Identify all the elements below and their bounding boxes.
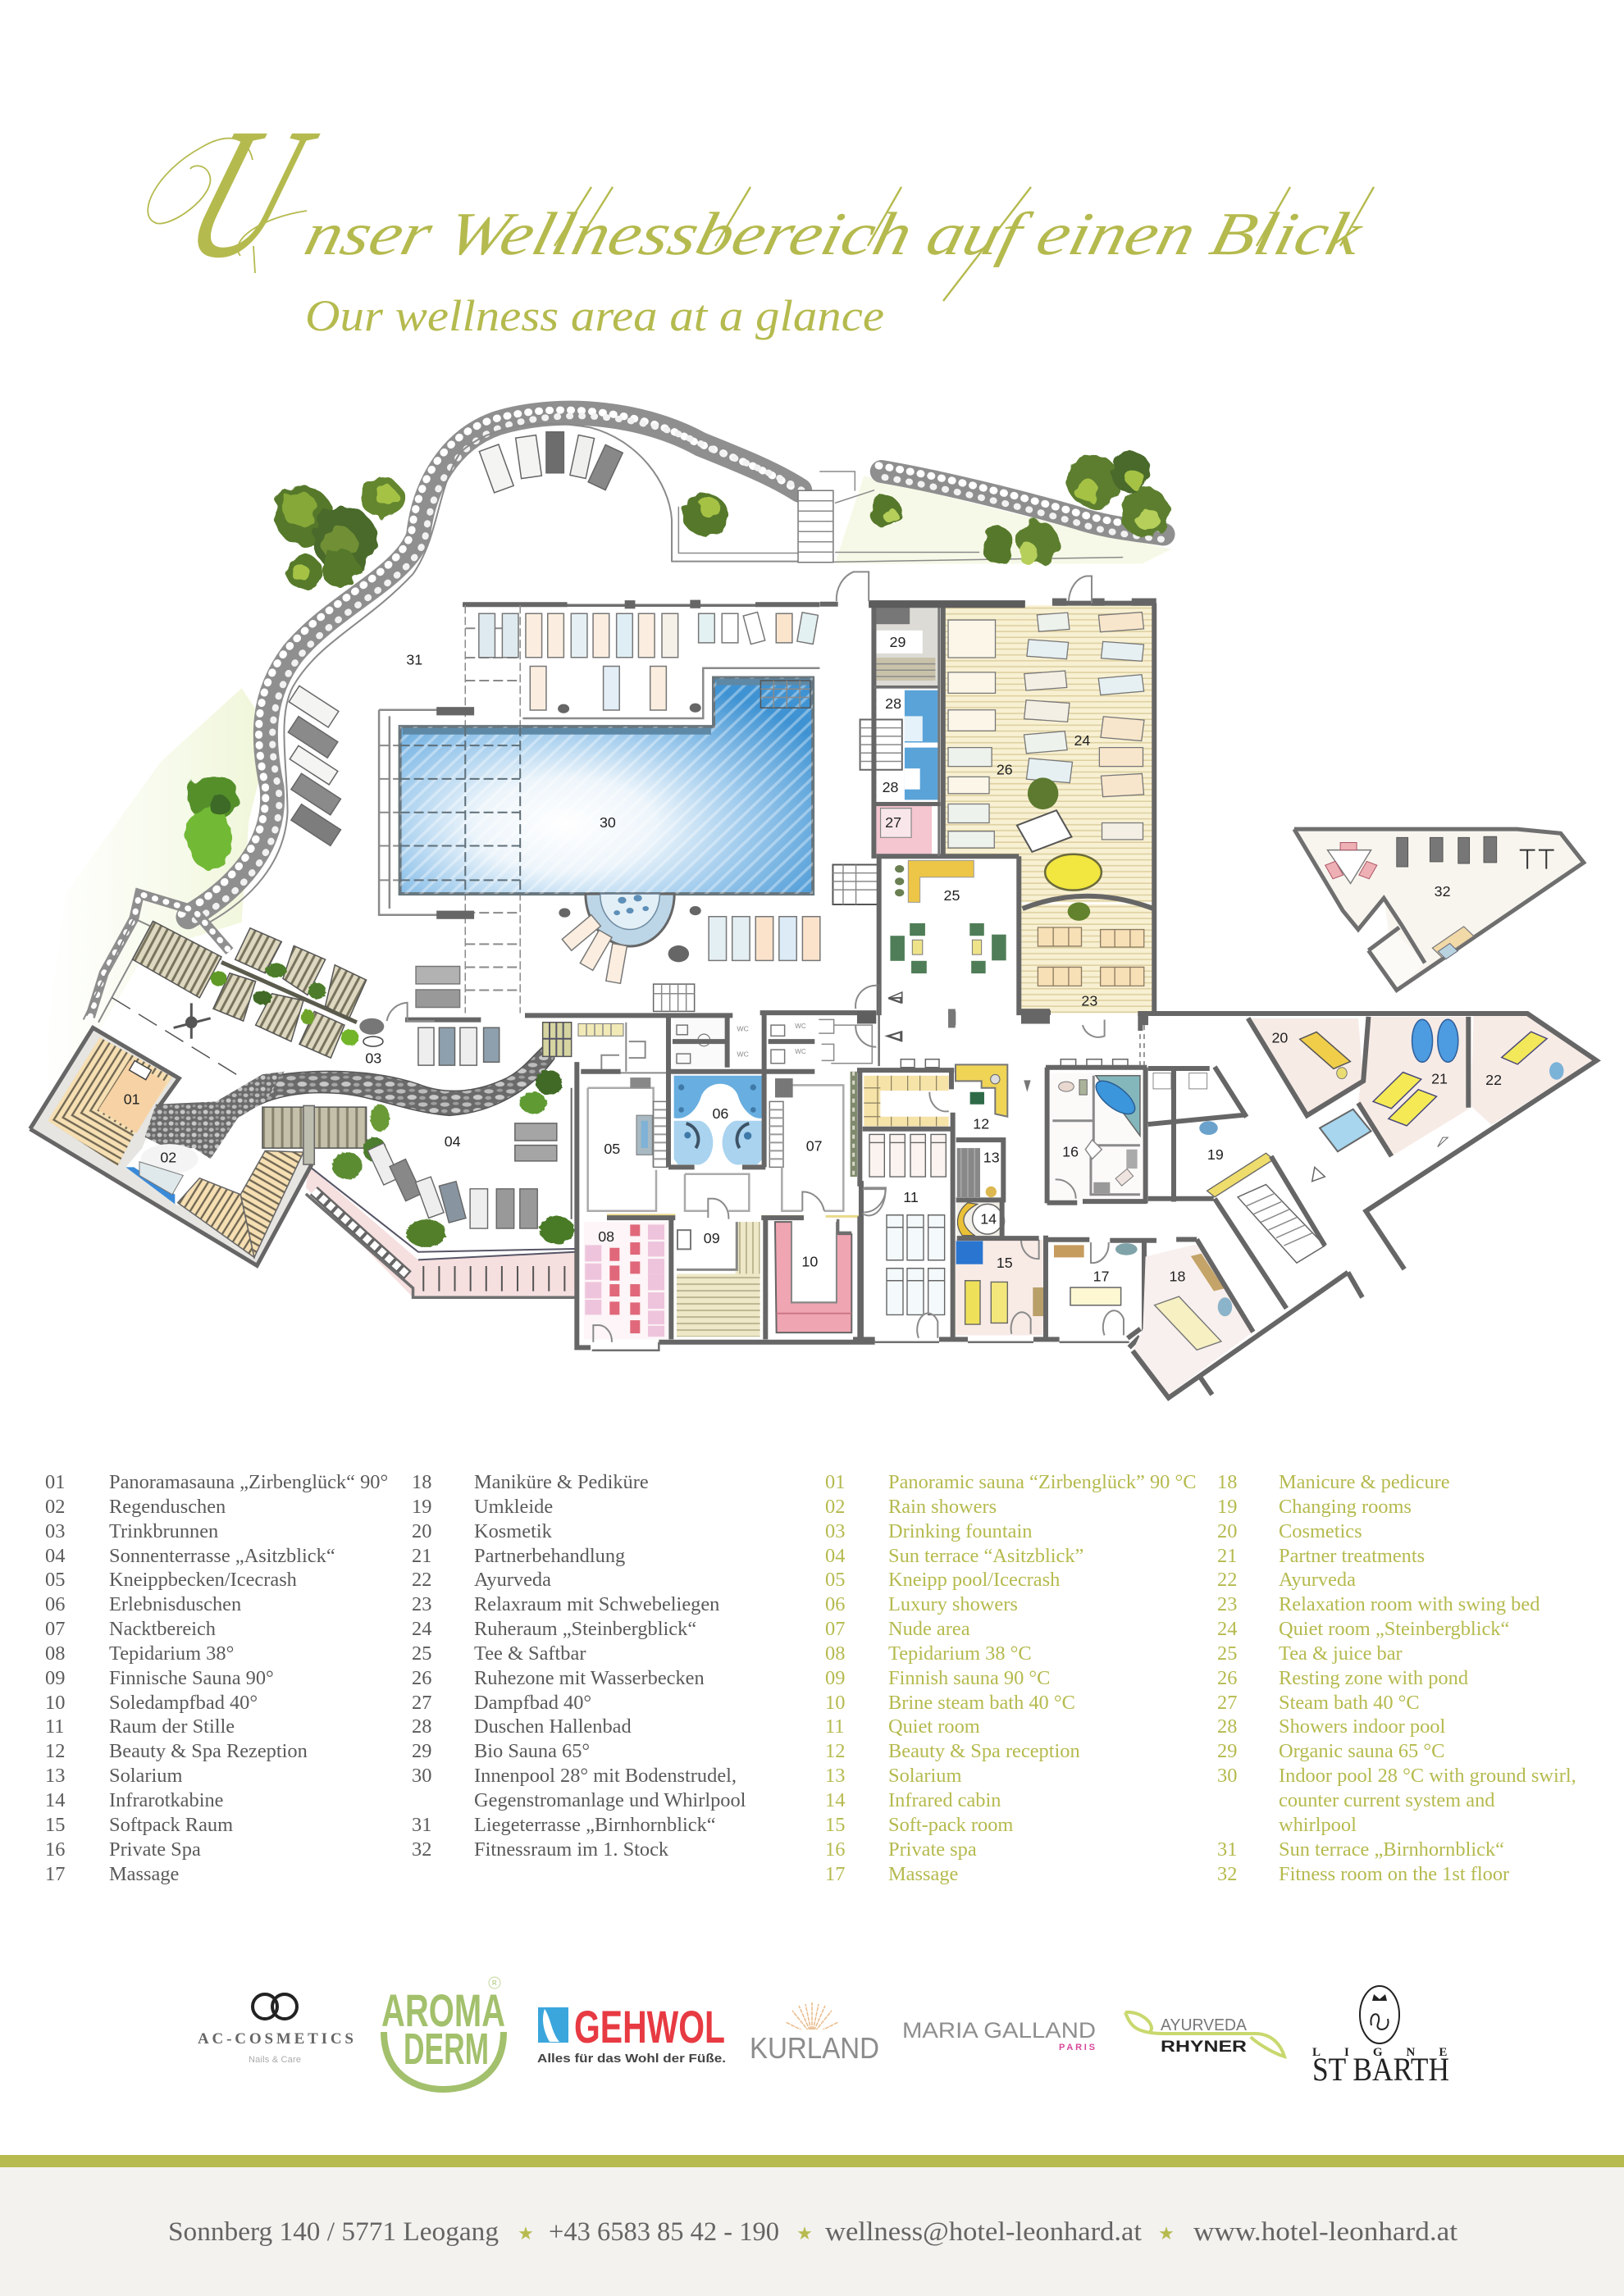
legend: German column 2: Duschen Hallenbad <box>474 1715 632 1738</box>
legend: German column 1: 17 <box>45 1863 65 1884</box>
legend: German column 1: 04 <box>45 1545 65 1567</box>
room numbers: 32 <box>1435 883 1451 900</box>
room numbers: 23 <box>1081 993 1097 1009</box>
room 08 tepidarium <box>584 1222 667 1342</box>
room numbers: 06 <box>712 1105 728 1122</box>
legend: German column 1: 08 <box>45 1642 65 1665</box>
logo: Maria Galland <box>902 2018 1096 2052</box>
legend: German column 1 <box>45 1471 388 1884</box>
room 05 kneipp <box>588 1077 667 1211</box>
legend: German column 2: Partnerbehandlung <box>474 1545 625 1567</box>
room 29 bio sauna <box>874 605 941 689</box>
legend: English column 1: 17 <box>825 1863 845 1884</box>
star icon: ★ <box>1158 2224 1175 2244</box>
footer email: wellness@hotel-leonhard.at <box>825 2217 1142 2247</box>
loungers room 24 <box>1024 613 1144 840</box>
room 16 private spa <box>1050 1059 1143 1200</box>
room 21 partner treatment <box>1358 1017 1468 1156</box>
room numbers: 29 <box>890 634 906 650</box>
legend: English column 1: 14 <box>825 1789 845 1811</box>
legend: German column 1: 05 <box>45 1569 65 1591</box>
logo: Aroma Derm: AROMA <box>381 1984 505 2036</box>
legend: German column 1: Infrarotkabine <box>109 1789 223 1811</box>
room 06 showers <box>674 1076 763 1164</box>
room numbers: 14 <box>980 1211 997 1228</box>
room numbers: 12 <box>973 1116 989 1132</box>
room 07 nude area <box>685 1072 857 1219</box>
legend: English column 2: Sun terrace „Birnhornblick“ <box>1279 1838 1504 1861</box>
legend: English column 1: Finnish sauna 90 °C <box>888 1667 1050 1689</box>
legend: English column 1: 06 <box>825 1593 845 1615</box>
room numbers: 04 <box>445 1133 461 1150</box>
room numbers: 07 <box>806 1137 823 1154</box>
brand logos row <box>198 1976 1471 2093</box>
room numbers: 27 <box>885 814 901 831</box>
planters at 23 <box>1068 902 1090 921</box>
heading: German script title <box>148 90 1374 301</box>
legend: English column 2: 22 <box>1217 1569 1237 1591</box>
room numbers: 08 <box>598 1228 614 1245</box>
legend: English column 2: Tea & juice bar <box>1279 1642 1403 1665</box>
logo: Ayurveda Rhyner: RHYNER <box>1161 2039 1247 2056</box>
legend: German column 2: Ruheraum „Steinbergblick“ <box>474 1618 696 1640</box>
legend: English column 1: 12 <box>825 1740 845 1762</box>
loungers around pool <box>416 612 820 1007</box>
legend: English column 2: Partner treatments <box>1279 1545 1425 1567</box>
legend: German column 1: Trinkbrunnen <box>109 1520 218 1542</box>
room 22 ayurveda <box>1471 1015 1594 1125</box>
legend: German column 2: 24 <box>412 1618 431 1640</box>
logo: Gehwol <box>537 2001 726 2066</box>
legend: English column 1: Rain showers <box>888 1496 997 1518</box>
legend: English column 1: Private spa <box>888 1838 977 1861</box>
pool stairs <box>654 984 695 1011</box>
panel: spa wing with treatment rooms <box>1020 1013 1597 1398</box>
panel: indoor pool hall <box>379 600 819 1014</box>
legend: English column 1: 11 <box>825 1715 845 1738</box>
legend: English column 2: 19 <box>1217 1496 1237 1518</box>
room numbers: 19 <box>1207 1146 1224 1163</box>
logo: Ayurveda Rhyner <box>1125 2012 1284 2057</box>
legend: German column 1: 11 <box>45 1715 64 1738</box>
legend: English column 1: 13 <box>825 1765 845 1787</box>
WC cubicles <box>674 1018 872 1068</box>
legend: English column 2: Relaxation room with swing bed <box>1279 1593 1540 1615</box>
legend: English column 2: 20 <box>1217 1520 1237 1542</box>
panel: sun terrace 04 <box>251 1020 575 1297</box>
legend: German column 1: Soledampfbad 40° <box>109 1692 258 1714</box>
loungers on terrace 04 <box>367 1143 537 1228</box>
room 23 lounge beds <box>1038 927 1144 986</box>
legend: German column 2: 22 <box>412 1569 431 1591</box>
deck pair <box>262 1105 367 1164</box>
sun loungers on terrace 31 <box>288 432 623 845</box>
legend: English column 2: Resting zone with pond <box>1279 1667 1468 1689</box>
legend: German column 1: Raum der Stille <box>109 1715 235 1738</box>
legend: German column 1: Massage <box>109 1863 179 1884</box>
legend: English column 1: Panoramic sauna “Zirbenglück” 90 °C <box>888 1471 1196 1493</box>
legend: English column 1: Massage <box>888 1863 958 1884</box>
legend: German column 2: 29 <box>412 1740 431 1762</box>
lawn wash <box>37 476 1171 1113</box>
legend: English column 2: Fitness room on the 1st floor <box>1279 1863 1509 1884</box>
room numbers: 13 <box>983 1150 1000 1166</box>
panel: rooms 05 to 10 <box>525 984 901 1351</box>
WC cubicles: WC <box>795 1023 806 1030</box>
room numbers: 26 <box>997 762 1013 778</box>
legend: English column 2: Quiet room „Steinbergblick“ <box>1279 1618 1509 1640</box>
heading: German script title: nser Wellnessbereich auf einen Blick <box>299 201 1370 268</box>
loungers room 26 <box>948 620 996 848</box>
room 20 kosmetik <box>1248 1018 1390 1115</box>
stone wall upper right <box>820 466 1166 563</box>
interior walls and outer walls <box>1020 1013 1597 1398</box>
legend: English column 1: Luxury showers <box>888 1593 1018 1615</box>
legend: German column 2: Gegenstromanlage und Whirlpool <box>474 1789 746 1811</box>
legend: German column 1: 16 <box>45 1838 65 1861</box>
legend: German column 2: 18 <box>412 1471 431 1493</box>
logo: Aroma Derm: DERM <box>404 2025 489 2074</box>
logo: Ligne St Barth <box>1312 1986 1471 2088</box>
legend: German column 2: 19 <box>412 1496 431 1518</box>
walls rooms 11 to 17 <box>853 1009 1156 1347</box>
heading: English subtitle: Our wellness area at a glance <box>305 291 884 340</box>
legend: English column 2: 24 <box>1217 1618 1237 1640</box>
room numbers: 10 <box>801 1253 818 1269</box>
WC cubicles: WC <box>737 1050 749 1058</box>
WC cubicles: WC <box>737 1024 749 1032</box>
legend: German column 2: 26 <box>412 1667 431 1689</box>
legend: English column 2: Cosmetics <box>1279 1520 1362 1542</box>
legend: English column 2: Manicure & pedicure <box>1279 1471 1450 1493</box>
room numbers: 28 <box>883 779 899 795</box>
wooden sun loungers <box>213 928 367 1058</box>
legend: English column 2: counter current system and <box>1279 1789 1494 1811</box>
legend: German column 2: Umkleide <box>474 1496 553 1518</box>
room 15 softpack <box>956 1240 1043 1335</box>
legend: English column 1: 07 <box>825 1618 845 1640</box>
footer address: Sonnberg 140 / 5771 Leogang <box>168 2217 499 2247</box>
legend: German column 2: Ayurveda <box>474 1569 551 1591</box>
stone wall around terrace <box>181 410 815 925</box>
legend: German column 2: Fitnessraum im 1. Stock <box>474 1838 668 1861</box>
room numbers: 15 <box>997 1255 1013 1271</box>
room 25 tea bar <box>833 856 1019 1027</box>
logo: Aroma Derm: R <box>492 1979 497 1987</box>
deck overlay on pool <box>400 727 520 894</box>
room 11 beds <box>869 1134 946 1314</box>
room 32 fitness <box>1294 827 1584 991</box>
legend: English column 1: 02 <box>825 1496 845 1518</box>
logo: Maria Galland: MARIA GALLAND <box>902 2018 1096 2043</box>
logo: Aroma Derm <box>381 1977 505 2089</box>
legend: German column 2: 28 <box>412 1715 431 1738</box>
legend: German column 2: 20 <box>412 1520 431 1542</box>
legend: German column 2: Innenpool 28° mit Bodenstrudel, <box>474 1765 737 1787</box>
deck lines <box>379 604 819 1014</box>
room numbers: 22 <box>1485 1072 1502 1088</box>
legend: German column 2: 23 <box>412 1593 431 1615</box>
room 11 tile rim <box>864 1059 949 1126</box>
pergola beam <box>221 962 357 1023</box>
legend: German column 2: 31 <box>412 1814 431 1836</box>
legend: English column 1: 10 <box>825 1692 845 1714</box>
room numbers: 03 <box>365 1050 381 1066</box>
whirlpool <box>586 894 674 946</box>
trees <box>188 451 1170 870</box>
lattice planter <box>1017 777 1071 852</box>
room 27 steam bath <box>877 805 932 855</box>
room 17 massage <box>1054 1242 1138 1335</box>
logo: Kurland: KURLAND <box>750 2031 879 2065</box>
wall to terrace <box>405 1018 481 1023</box>
panel: rooms 11 to 17 <box>853 1009 1156 1347</box>
logo: Ligne St Barth: ST BARTH <box>1312 2051 1449 2088</box>
legend: German column 1: 07 <box>45 1618 65 1640</box>
panel: sauna garden with panorama sauna <box>30 894 435 1265</box>
legend: German column 1: Finnische Sauna 90° <box>109 1667 274 1689</box>
legend: English column 2: Organic sauna 65 °C <box>1279 1740 1444 1762</box>
legend: German column 2: 27 <box>412 1692 431 1714</box>
room 13 solarium <box>957 1148 997 1197</box>
legend: German column 1: 13 <box>45 1765 65 1787</box>
dashed path <box>112 998 240 1077</box>
legend: German column 2: Liegeterrasse „Birnhornblick“ <box>474 1814 716 1836</box>
room 14 infrared <box>957 1200 1004 1237</box>
legend: German column 1: 12 <box>45 1740 65 1762</box>
showers 02 <box>125 1144 198 1204</box>
legend: German column 2: 30 <box>412 1765 431 1787</box>
room numbers: 01 <box>124 1091 140 1107</box>
room numbers: 05 <box>604 1141 620 1157</box>
cobble path <box>251 1039 554 1115</box>
legend: German column 2: Ruhezone mit Wasserbecken <box>474 1667 705 1689</box>
legend: English column 1: 05 <box>825 1569 845 1591</box>
rooms 28 showers <box>860 690 941 801</box>
legend: English column 1: 08 <box>825 1642 845 1665</box>
legend: German column 1: Beauty & Spa Rezeption <box>109 1740 308 1762</box>
fountain 03 <box>359 1003 435 1046</box>
wedge walls <box>30 1027 312 1265</box>
outdoor staircase <box>798 490 833 563</box>
legend: English column 1: 01 <box>825 1471 845 1493</box>
room numbers: 31 <box>406 652 422 668</box>
footer phone: +43 6583 85 42 - 190 <box>549 2217 779 2247</box>
panel: right wing with quiet rooms <box>820 572 1584 1027</box>
legend: English column 2: 29 <box>1217 1740 1237 1762</box>
room numbers: 11 <box>903 1189 919 1205</box>
legend: English column 1: Quiet room <box>888 1715 980 1738</box>
room numbers <box>124 634 1502 1284</box>
star icon: ★ <box>518 2224 534 2244</box>
legend: German column 1: Tepidarium 38° <box>109 1642 234 1665</box>
legend: English column 1: Drinking fountain <box>888 1520 1032 1542</box>
legend: English column 1: Infrared cabin <box>888 1789 1001 1811</box>
legend: German column 1: Solarium <box>109 1765 182 1787</box>
stair and steps <box>543 1023 667 1073</box>
legend: English column 1: 09 <box>825 1667 845 1689</box>
legend: German column 2: 32 <box>412 1838 431 1861</box>
legend: German column 2: Maniküre & Pediküre <box>474 1471 649 1493</box>
shrubs <box>406 1070 574 1247</box>
legend: English column 1: Brine steam bath 40 °C <box>888 1692 1075 1714</box>
legend: English column 1: 16 <box>825 1838 845 1861</box>
legend: English column 2: Changing rooms <box>1279 1496 1412 1518</box>
legend: German column 2 <box>412 1471 746 1861</box>
legend: German column 1: Private Spa <box>109 1838 201 1861</box>
room numbers: 09 <box>704 1230 720 1246</box>
yellow oval pool <box>1045 854 1102 891</box>
walls right wing <box>820 572 1156 1015</box>
floor plan drawing <box>28 400 1601 1401</box>
legend: English column 2: Showers indoor pool <box>1279 1715 1445 1738</box>
logo: Ligne St Barth: LIGNE <box>1312 2046 1471 2059</box>
legend: English column 2: Steam bath 40 °C <box>1279 1692 1420 1714</box>
legend: English column 1 <box>825 1471 1196 1884</box>
legend: German column 1: Kneippbecken/Icecrash <box>109 1569 297 1591</box>
legend: English column 2: 32 <box>1217 1863 1237 1884</box>
legend: German column 2: Tee & Saftbar <box>474 1642 586 1665</box>
pink terrace <box>306 1166 575 1297</box>
legend: German column 1: Panoramasauna „Zirbenglück“ 90° <box>109 1471 388 1493</box>
legend: German column 1: 14 <box>45 1789 65 1811</box>
legend: English column 2: 28 <box>1217 1715 1237 1738</box>
logo: AC-Cosmetics: Nails & Care <box>249 2055 301 2065</box>
sun symbol <box>174 1003 211 1039</box>
legend: English column 1: 04 <box>825 1545 845 1567</box>
legend: German column 1: Regenduschen <box>109 1496 226 1518</box>
blue shower diamond <box>1320 1109 1371 1151</box>
legend: German column 2: Bio Sauna 65° <box>474 1740 590 1762</box>
legend: German column 1: Softpack Raum <box>109 1814 233 1836</box>
legend: English column 2: 18 <box>1217 1471 1237 1493</box>
logo: Kurland <box>750 2002 879 2065</box>
legend: English column 1: Nude area <box>888 1618 970 1640</box>
room numbers: 20 <box>1272 1029 1288 1046</box>
room numbers: 24 <box>1074 732 1090 749</box>
footer band <box>0 2167 1624 2296</box>
shrubs between loungers <box>211 963 358 1046</box>
room numbers: 17 <box>1093 1268 1110 1284</box>
legend: German column 1: 02 <box>45 1496 65 1518</box>
star icon: ★ <box>796 2224 813 2244</box>
footer website: www.hotel-leonhard.at <box>1193 2217 1457 2247</box>
legend: English column 1: Tepidarium 38 °C <box>888 1642 1032 1665</box>
column blocks <box>436 600 701 962</box>
legend: German column 1: Erlebnisduschen <box>109 1593 241 1615</box>
loungers near room 03 <box>418 1027 557 1161</box>
legend: English column 1: Kneipp pool/Icecrash <box>888 1569 1060 1591</box>
wooden L deck <box>178 1150 303 1257</box>
shrubs beside deck <box>332 1105 390 1179</box>
legend: English column 1: Beauty & Spa reception <box>888 1740 1080 1762</box>
pergola frame and slats <box>84 918 221 1023</box>
stones behind pergola <box>90 894 230 1017</box>
legend: English column 2: whirlpool <box>1279 1814 1357 1836</box>
room 19 tiles and stairs <box>1153 1073 1325 1263</box>
legend: German column 1: 03 <box>45 1520 65 1542</box>
yellow thresholds <box>607 1215 861 1216</box>
legend: German column 1: 15 <box>45 1814 65 1836</box>
logo: Ayurveda Rhyner: AYURVEDA <box>1161 2016 1248 2034</box>
room numbers: 21 <box>1431 1070 1448 1086</box>
wooden floors 24 and 26 <box>943 605 1020 856</box>
legend: English column 2: 21 <box>1217 1545 1237 1567</box>
legend: English column 2: 26 <box>1217 1667 1237 1689</box>
sauna wedge <box>30 1027 312 1265</box>
legend: English column 2: Ayurveda <box>1279 1569 1356 1591</box>
logo: Maria Galland: PARIS <box>1059 2043 1095 2052</box>
room 10 brine steam bath <box>775 1219 851 1332</box>
legend: German column 2: 21 <box>412 1545 431 1567</box>
logo: Gehwol: GEHWOL <box>574 2001 725 2052</box>
legend: English column 1: Soft-pack room <box>888 1814 1013 1836</box>
cobble at showers <box>145 1072 285 1159</box>
legend: English column 2: 30 <box>1217 1765 1237 1787</box>
legend: German column 1: 06 <box>45 1593 65 1615</box>
legend: English column 2: Indoor pool 28 °C with ground swirl, <box>1279 1765 1576 1787</box>
room numbers: 30 <box>600 814 616 831</box>
legend: German column 1: 10 <box>45 1692 65 1714</box>
room numbers: 25 <box>944 887 960 904</box>
legend: German column 2: Dampfbad 40° <box>474 1692 591 1714</box>
legend: English column 2: 25 <box>1217 1642 1237 1665</box>
logo: AC-Cosmetics: AC-COSMETICS <box>198 2030 354 2048</box>
legend: English column 2: 27 <box>1217 1692 1237 1714</box>
logo: AC-Cosmetics <box>198 1994 354 2065</box>
legend: English column 2: 31 <box>1217 1838 1237 1861</box>
walls rooms 05 to 10 <box>525 984 901 1351</box>
logo: Gehwol: Alles für das Wohl der Füße. <box>537 2052 726 2066</box>
pool water <box>400 677 813 894</box>
legend: German column 1: Sonnenterrasse „Asitzblick“ <box>109 1545 335 1567</box>
legend: English column 2: 23 <box>1217 1593 1237 1615</box>
room numbers: 18 <box>1170 1268 1185 1284</box>
legend: English column 1: 03 <box>825 1520 845 1542</box>
room numbers: 28 <box>885 695 901 712</box>
room numbers: 02 <box>160 1150 176 1166</box>
legend: English column 1: Solarium <box>888 1765 961 1787</box>
pool ladder <box>760 681 810 708</box>
legend: English column 1: 15 <box>825 1814 845 1836</box>
legend: German column 1: 01 <box>45 1471 65 1493</box>
title block <box>147 107 1375 340</box>
legend: German column 2: Relaxraum mit Schwebeliegen <box>474 1593 719 1615</box>
legend: English column 1: Sun terrace “Asitzblick” <box>888 1545 1083 1567</box>
legend: English column 2 <box>1217 1471 1576 1884</box>
legend: German column 2: Kosmetik <box>474 1520 552 1542</box>
legend: German column 2: 25 <box>412 1642 431 1665</box>
room numbers: 16 <box>1062 1144 1079 1160</box>
room 12 counter <box>956 1064 1031 1117</box>
room 09 finnish sauna <box>677 1222 760 1337</box>
legend: German column 1: Nacktbereich <box>109 1618 216 1640</box>
WC cubicles: WC <box>795 1048 806 1055</box>
room 18 manicure <box>1133 1244 1253 1395</box>
legend: German column 1: 09 <box>45 1667 65 1689</box>
footer accent bar <box>0 2155 1624 2167</box>
